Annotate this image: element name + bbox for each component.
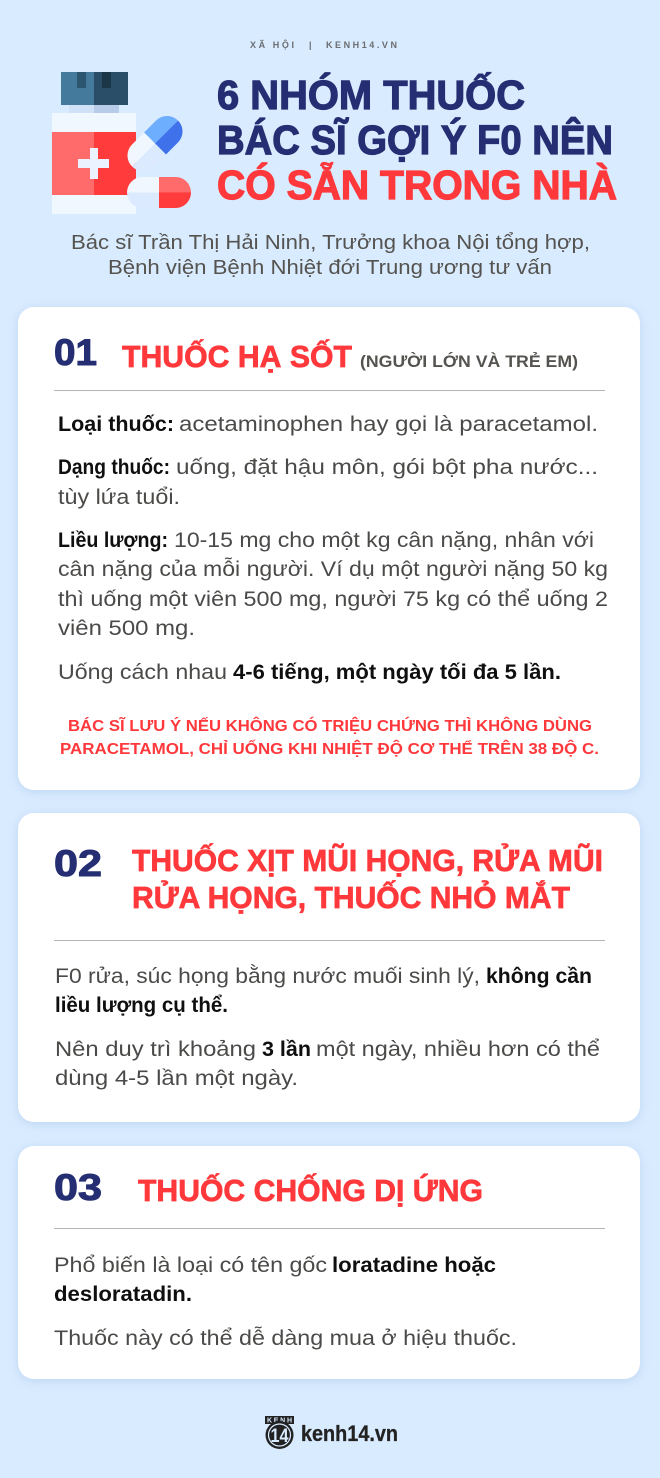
warning note: PARACETAMOL, CHỈ UỐNG KHI NHIỆT ĐỘ CƠ THỂ TRÊN 38 ĐỘ C. — [60, 738, 599, 758]
text: dosage form — [58, 456, 598, 509]
source label: KENH14.VN — [326, 40, 397, 50]
heading 02: RỬA HỌNG, THUỐC NHỎ MẮT — [132, 879, 570, 915]
logo: kenh14.vn: 14 — [270, 1426, 289, 1447]
text: rinsing: không cần — [486, 965, 592, 988]
text: frequency: dùng 4-5 lần một ngày. — [55, 1067, 298, 1090]
text: dose: Liều lượng: — [58, 529, 168, 552]
text: generic name: loratadine hoặc — [332, 1254, 496, 1277]
text: dosage form: tùy lứa tuổi. — [58, 486, 180, 509]
subtitle: Bác sĩ Trần Thị Hải Ninh, Trưởng khoa Nội tổng hợp, — [71, 232, 590, 254]
text: generic name — [54, 1254, 496, 1306]
title: BÁC SĨ GỢI Ý F0 NÊN — [217, 117, 613, 163]
panel: 02 nose and throat — [18, 813, 640, 1122]
text: rinsing: liều lượng cụ thể. — [55, 994, 228, 1017]
text: frequency: 3 lần — [262, 1038, 311, 1061]
logo: kenh14.vn — [265, 1416, 398, 1449]
subtitle — [71, 232, 590, 279]
text: dosage form: Dạng thuốc: — [58, 456, 170, 479]
text: frequency: một ngày, nhiều hơn có thể — [316, 1038, 600, 1061]
text: frequency — [55, 1038, 600, 1090]
text: rinsing — [55, 965, 592, 1017]
text: dose: viên 500 mg. — [58, 617, 195, 640]
source label — [250, 39, 397, 50]
text: dose: cân nặng của mỗi người. Ví dụ một người nặng 50 kg — [58, 558, 608, 581]
source label: | — [309, 40, 312, 50]
source label: XÃ HỘI — [250, 39, 294, 50]
icon: medicine bottle and pills — [52, 72, 191, 214]
title — [217, 72, 617, 208]
number 03: 03 — [54, 1167, 102, 1208]
text: generic name: Phổ biến là loại có tên gốc — [54, 1254, 327, 1277]
title: 6 NHÓM THUỐC — [217, 72, 525, 118]
panel: 03 antihistamines — [18, 1146, 640, 1379]
warning note — [60, 715, 599, 758]
text: frequency: Nên duy trì khoảng — [55, 1038, 256, 1061]
warning note: BÁC SĨ LƯU Ý NẾU KHÔNG CÓ TRIỆU CHỨNG THÌ KHÔNG DÙNG — [68, 715, 592, 735]
text: frequency: Uống cách nhau — [58, 661, 227, 684]
text: dose — [58, 529, 608, 640]
number 01: 01 — [54, 332, 97, 373]
text: availability: Thuốc này có thể dễ dàng mua ở hiệu thuốc. — [54, 1327, 517, 1350]
subtitle: Bệnh viện Bệnh Nhiệt đới Trung ương tư vấn — [108, 257, 552, 279]
number 02: 02 — [54, 843, 102, 884]
logo: kenh14.vn: KENH — [267, 1418, 292, 1424]
text: frequency — [58, 661, 561, 684]
heading 01: THUỐC HẠ SỐT — [122, 338, 352, 374]
text: drug type: Loại thuốc: — [58, 413, 174, 436]
text: drug type — [58, 413, 598, 436]
text: dosage form: uống, đặt hậu môn, gói bột pha nước... — [176, 456, 598, 479]
logo: kenh14.vn: kenh14.vn — [301, 1421, 398, 1446]
text: rinsing: F0 rửa, súc họng bằng nước muối sinh lý, — [55, 965, 480, 988]
text: generic name: desloratadin. — [54, 1283, 192, 1306]
text: frequency: 4-6 tiếng, một ngày tối đa 5 lần. — [233, 661, 561, 684]
text: dose: thì uống một viên 500 mg, người 75 kg có thể uống 2 — [58, 588, 608, 611]
heading 03: THUỐC CHỐNG DỊ ỨNG — [138, 1172, 483, 1208]
title: CÓ SẴN TRONG NHÀ — [217, 162, 617, 208]
heading note: (NGƯỜI LỚN VÀ TRẺ EM) — [360, 352, 578, 371]
text: drug type: acetaminophen hay gọi là paracetamol. — [179, 413, 598, 436]
panel: 01 fever reducers — [18, 307, 640, 790]
heading 02 — [132, 842, 603, 915]
heading 02: THUỐC XỊT MŨI HỌNG, RỬA MŨI — [132, 842, 603, 878]
text: dose: 10-15 mg cho một kg cân nặng, nhân với — [174, 529, 594, 552]
